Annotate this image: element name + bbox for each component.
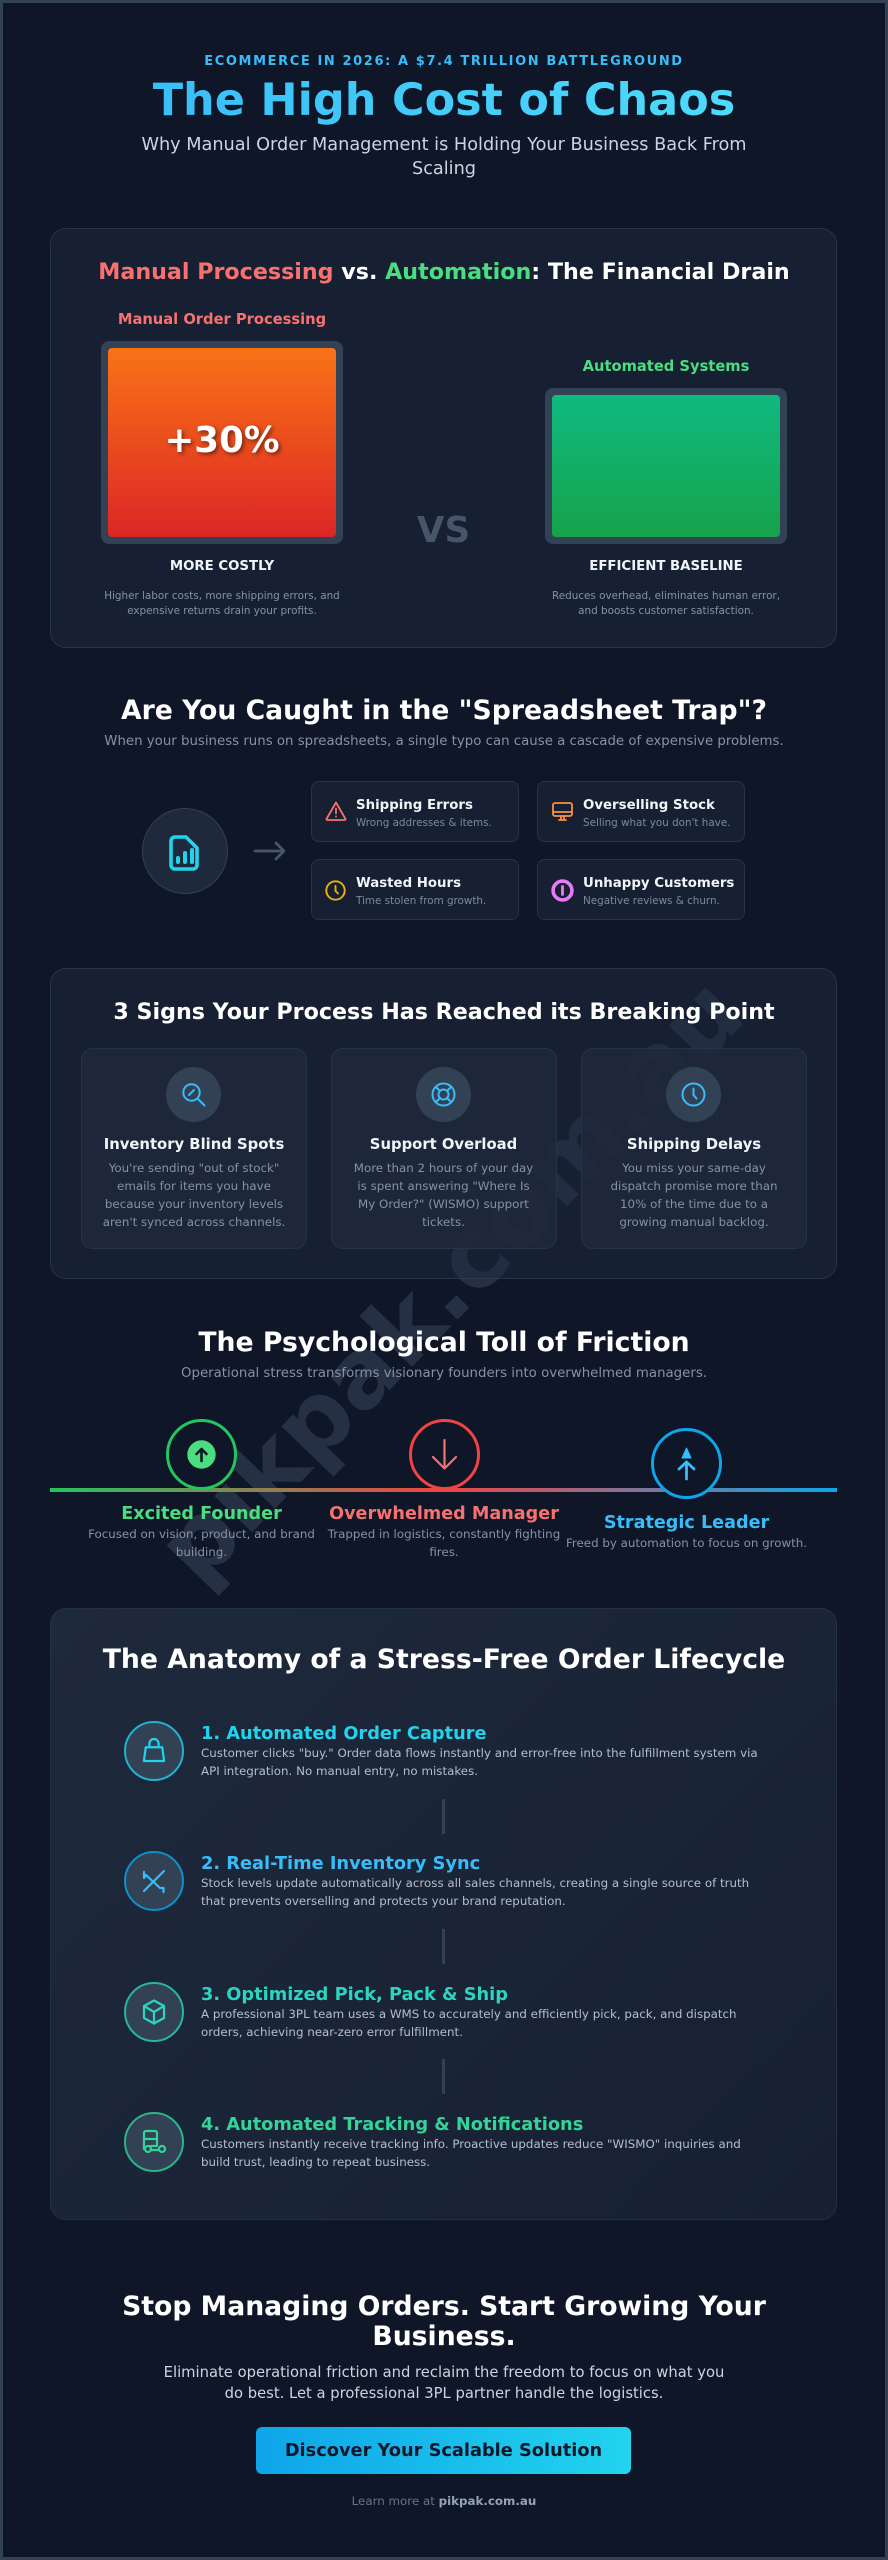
step 2 — [124, 1851, 749, 1911]
text: API integration. No manual entry, no mistakes. — [201, 1764, 478, 1778]
title: 1. Automated Order Capture — [201, 1724, 487, 1744]
icon: founder circle — [166, 1419, 237, 1490]
text — [328, 1527, 560, 1559]
text — [201, 1746, 758, 1778]
card: shipping errors — [311, 781, 519, 842]
text — [201, 2007, 737, 2039]
text: cta: Eliminate operational friction and reclaim the freedom to focus on what you — [164, 2364, 724, 2381]
text: Selling what you don't have. — [583, 816, 730, 828]
text: Stock levels update automatically across all sales channels, creating a single source of truth — [201, 1876, 749, 1890]
header — [141, 54, 747, 178]
manual caption: MORE COSTLY — [170, 559, 274, 574]
heading: spreadsheet trap: Are You Caught in the "Spreadsheet Trap"? — [121, 695, 767, 726]
manual description: Higher labor costs, more shipping errors, and — [104, 590, 340, 602]
subtitle: Scaling — [412, 158, 476, 178]
spreadsheet icon — [142, 808, 228, 894]
text: Trapped in logistics, constantly fighting — [328, 1527, 560, 1541]
journey line — [50, 1488, 837, 1492]
connector 2 — [442, 1929, 445, 1964]
icon: monitor — [552, 802, 573, 821]
text: orders, achieving near-zero error fulfillment. — [201, 2025, 463, 2039]
title: The High Cost of Chaos — [153, 74, 735, 126]
stage: strategic leader — [566, 1428, 807, 1550]
card: support overload — [330, 1048, 556, 1249]
text: Customers instantly receive tracking info. Proactive updates reduce "WISMO" inquiries and — [201, 2137, 741, 2151]
manual description: expensive returns drain your profits. — [127, 605, 317, 617]
card: inventory blind spots — [81, 1048, 307, 1249]
subheading: spreadsheet trap: When your business runs on spreadsheets, a single typo can cause a cascade of expensive problems. — [104, 734, 784, 748]
icon: bag — [124, 1721, 184, 1781]
automated caption: EFFICIENT BASELINE — [589, 559, 743, 574]
automated bar frame — [545, 388, 787, 544]
step 1 — [124, 1721, 758, 1781]
text: Negative reviews & churn. — [583, 894, 720, 906]
label: Overwhelmed Manager — [329, 1504, 559, 1524]
label: Strategic Leader — [604, 1513, 769, 1533]
text: A professional 3PL team uses a WMS to accurately and efficiently pick, pack, and dispatch — [201, 2007, 737, 2021]
text: emails for items you have — [117, 1179, 271, 1193]
button — [256, 2427, 631, 2474]
title: Shipping Errors — [356, 798, 473, 812]
icon: manager circle — [408, 1419, 480, 1490]
text: is spent answering "Where Is — [357, 1179, 530, 1193]
text: Wrong addresses & items. — [356, 816, 492, 828]
heading: cta: Stop Managing Orders. Start Growing Your — [122, 2291, 766, 2322]
heading: order lifecycle: The Anatomy of a Stress-Free Order Lifecycle — [103, 1644, 785, 1675]
text: dispatch promise more than — [611, 1179, 777, 1193]
text: fires. — [429, 1545, 459, 1559]
manual label: Manual Order Processing — [118, 311, 326, 328]
title: Support Overload — [370, 1136, 517, 1153]
icon: magnifier — [166, 1067, 221, 1122]
card: wasted hours — [311, 859, 519, 920]
icon: delivery truck — [124, 2112, 184, 2172]
text: because your inventory levels — [105, 1197, 283, 1211]
text: cta — [164, 2364, 724, 2402]
connector 3 — [442, 2059, 445, 2094]
text: 10% of the time due to a — [620, 1197, 768, 1211]
stage: excited founder — [88, 1419, 315, 1559]
text: More than 2 hours of your day — [354, 1161, 533, 1175]
VS label: VS — [417, 510, 470, 551]
title: Overselling Stock — [583, 798, 715, 812]
heading: financial drain: Manual Processing vs. Automation: The Financial Drain — [98, 259, 790, 285]
manual bar — [108, 348, 336, 537]
automated column — [545, 358, 787, 617]
automated label: Automated Systems — [583, 358, 749, 375]
title: 2. Real-Time Inventory Sync — [201, 1854, 480, 1874]
heading: cta: Business. — [372, 2321, 516, 2352]
panel: breaking point — [50, 968, 837, 1279]
text: Focused on vision, product, and brand — [88, 1527, 315, 1541]
title: 4. Automated Tracking & Notifications — [201, 2115, 583, 2135]
text — [354, 1161, 533, 1229]
text: Time stolen from growth. — [356, 894, 486, 906]
title: Shipping Delays — [627, 1136, 761, 1153]
watermark: pikpak.com.au — [135, 956, 765, 1604]
manual column — [101, 311, 343, 617]
subtitle — [141, 134, 747, 178]
icon: box — [124, 1982, 184, 2042]
card: shipping delays — [581, 1048, 807, 1249]
icon: lifebuoy — [416, 1067, 470, 1122]
text — [201, 1876, 749, 1908]
eyebrow: ECOMMERCE IN 2026: A $7.4 TRILLION BATTLEGROUND — [204, 54, 684, 69]
text: My Order?" (WISMO) support — [358, 1197, 529, 1211]
stage: overwhelmed manager — [328, 1419, 560, 1559]
automated description: and boosts customer satisfaction. — [578, 605, 754, 617]
text — [88, 1527, 315, 1559]
automated description — [552, 590, 780, 617]
text — [201, 2137, 741, 2169]
card: unhappy customers — [537, 859, 745, 920]
text — [103, 1161, 285, 1229]
subtitle: Why Manual Order Management is Holding Your Business Back From — [141, 134, 747, 154]
text: cta: do best. Let a professional 3PL partner handle the logistics. — [225, 2385, 663, 2402]
title: Unhappy Customers — [583, 876, 734, 890]
subheading: psychological toll: Operational stress transforms visionary founders into overwhelmed managers. — [181, 1366, 707, 1380]
automated bar — [552, 395, 780, 537]
text: Customer clicks "buy." Order data flows instantly and error-free into the fulfillment system via — [201, 1746, 758, 1760]
manual bar frame — [101, 341, 343, 544]
heading: cta — [122, 2291, 766, 2352]
heading: psychological toll: The Psychological Toll of Friction — [198, 1327, 690, 1358]
text: tickets. — [422, 1215, 465, 1229]
text: building. — [176, 1545, 227, 1559]
connector 1 — [442, 1799, 445, 1834]
automated description: Reduces overhead, eliminates human error, — [552, 590, 780, 602]
panel: financial drain — [50, 228, 837, 648]
step 4 — [124, 2112, 741, 2172]
icon: sync — [124, 1851, 184, 1911]
text: You miss your same-day — [622, 1161, 766, 1175]
label: Excited Founder — [121, 1504, 282, 1524]
text: growing manual backlog. — [619, 1215, 769, 1229]
text: You're sending "out of stock" — [109, 1161, 279, 1175]
heading: breaking point: 3 Signs Your Process Has Reached its Breaking Point — [113, 999, 775, 1025]
title: Wasted Hours — [356, 876, 461, 890]
icon: clock — [325, 880, 346, 901]
icon: unhappy face — [551, 879, 574, 902]
title: Inventory Blind Spots — [104, 1136, 284, 1153]
card: overselling stock — [537, 781, 745, 842]
arrow — [254, 842, 286, 860]
text: build trust, leading to repeat business. — [201, 2155, 430, 2169]
+30% value: +30% — [164, 420, 279, 461]
icon: warning — [326, 802, 346, 821]
text — [611, 1161, 777, 1229]
text: aren't synced across channels. — [103, 1215, 285, 1229]
manual description — [104, 590, 340, 617]
call to action — [122, 2291, 766, 2508]
icon: leader circle — [651, 1428, 722, 1499]
text: that prevents overselling and protects your brand reputation. — [201, 1894, 566, 1908]
panel: order lifecycle — [50, 1608, 837, 2220]
step 3 — [124, 1982, 737, 2042]
footer link: Learn more at pikpak.com.au — [352, 2494, 536, 2508]
icon: clock — [666, 1067, 721, 1122]
title: 3. Optimized Pick, Pack & Ship — [201, 1985, 508, 2005]
text: Freed by automation to focus on growth. — [566, 1536, 807, 1550]
button: Discover Your Scalable Solution — [285, 2441, 602, 2461]
